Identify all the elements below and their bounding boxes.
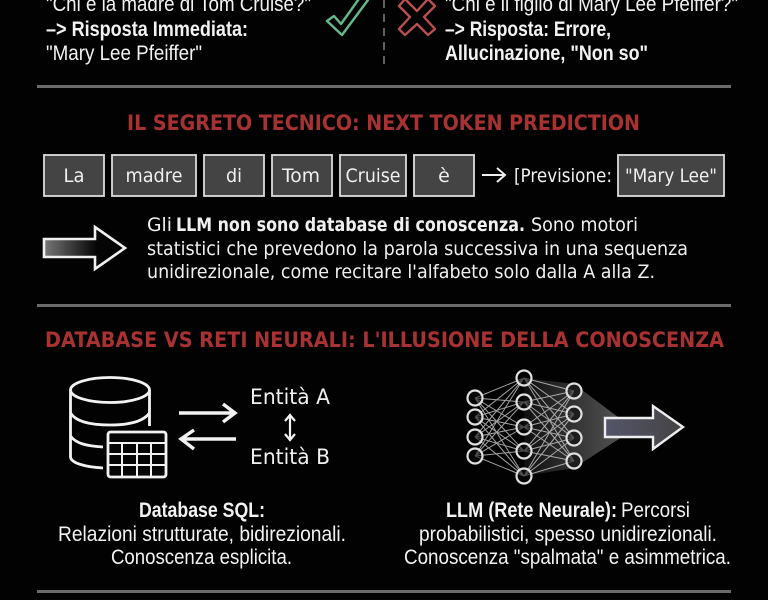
icon: cross mark	[399, 0, 435, 35]
caption: LLM neural network: Percorsi	[621, 499, 690, 522]
token: di	[204, 155, 264, 196]
caption: database SQL	[58, 499, 346, 569]
answer left value: "Mary Lee Pfeiffer"	[46, 42, 202, 65]
caption: LLM neural network: Conoscenza "spalmata" e asimmetrica.	[404, 546, 731, 569]
token: madre: madre	[126, 165, 182, 187]
token: Cruise: Cruise	[346, 165, 400, 187]
token: prediction: "Mary Lee"	[625, 165, 717, 187]
label: entity B: Entità B	[250, 445, 330, 469]
heading: database vs neural networks: DATABASE VS RETI NEURALI: L'ILLUSIONE DELLA CONOSCENZA	[45, 328, 725, 352]
answer right line two: Allucinazione, "Non so"	[445, 42, 648, 65]
icon: gradient arrow	[44, 227, 125, 269]
text block: explanation: Gli	[147, 214, 172, 236]
token: è: è	[438, 165, 450, 187]
token sequence	[44, 155, 724, 196]
arrow: left	[181, 430, 236, 449]
caption: LLM neural network: probabilistici, spesso unidirezionali.	[419, 523, 717, 546]
heading: technical secret: IL SEGRETO TECNICO: NEXT TOKEN PREDICTION	[127, 111, 640, 135]
text block: explanation	[147, 214, 688, 283]
token: La	[44, 155, 104, 196]
panel: reverse question	[399, 0, 738, 65]
token: Tom	[272, 155, 332, 196]
output fan	[524, 378, 622, 476]
connections	[475, 378, 574, 476]
token: è	[414, 155, 474, 196]
token: di: di	[226, 165, 242, 187]
token: La: La	[64, 165, 84, 187]
arrow: right	[179, 404, 235, 422]
token: madre	[112, 155, 196, 196]
icon: database with table	[70, 378, 166, 477]
token: Tom: Tom	[281, 165, 320, 187]
caption: database SQL: Conoscenza esplicita.	[111, 546, 292, 569]
arrow: to prediction	[482, 168, 505, 182]
panel: forward question	[46, 0, 368, 65]
caption: LLM neural network	[404, 499, 731, 569]
arrow: bidirectional entities	[285, 415, 295, 440]
output arrow	[605, 406, 683, 449]
text block: explanation: unidirezionale, come recitare l'alfabeto solo dalla A alla Z.	[147, 261, 655, 283]
text block: explanation: Sono motori	[531, 214, 638, 236]
nodes	[468, 370, 582, 484]
caption: LLM neural network: LLM (Rete Neurale):	[446, 499, 617, 522]
label: entity A: Entità A	[250, 385, 331, 409]
token: Cruise	[340, 155, 406, 196]
icon: check mark	[327, 0, 368, 35]
icon: neural network	[468, 370, 683, 484]
token: prediction	[618, 155, 724, 196]
caption: database SQL: Database SQL:	[139, 499, 265, 522]
text block: explanation: LLM non sono database di conoscenza.	[176, 214, 525, 236]
center dashed separator	[383, 0, 385, 67]
text block: explanation: statistici che prevedono la parola successiva in una sequenza	[147, 238, 688, 260]
prediction label: [Previsione:	[514, 165, 612, 187]
answer left label: –> Risposta Immediata:	[46, 18, 248, 41]
caption: database SQL: Relazioni strutturate, bidirezionali.	[58, 523, 346, 546]
answer right line one: –> Risposta: Errore,	[445, 18, 611, 41]
